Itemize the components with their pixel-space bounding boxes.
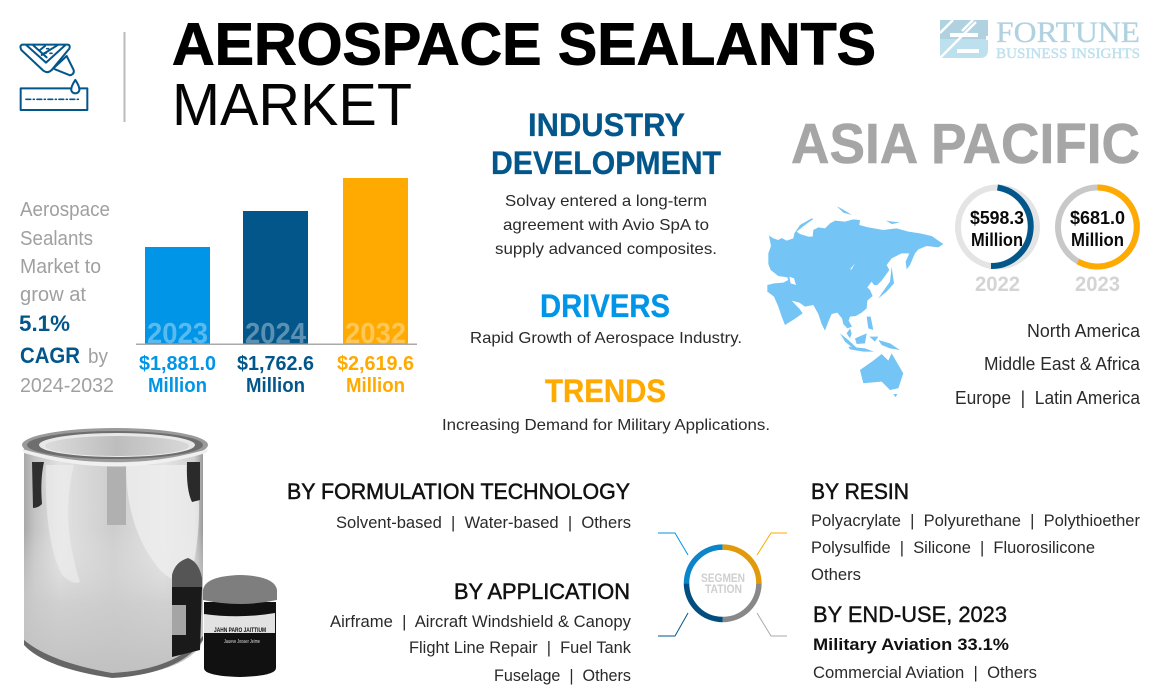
icon: sealant tube and surface: [20, 45, 87, 110]
bar 2032: Million: [346, 375, 405, 397]
small bottle: [172, 558, 202, 657]
segment: by resin: BY RESIN: [811, 479, 909, 504]
segment: by application: Airframe | Aircraft Windshield & Canopy: [330, 613, 632, 631]
panel: trends: [442, 373, 770, 434]
donut: 2022 value: [958, 188, 1037, 296]
logo: Fortune Business Insights: FORTUNE: [996, 16, 1140, 49]
text block: market growth CAGR: grow at: [20, 284, 86, 306]
image: sealant can and jars: [22, 428, 277, 678]
donut: 2023 value: Million: [1071, 230, 1124, 250]
text block: market growth CAGR: 2024-2032: [20, 375, 114, 397]
donut: 2023 value: [1058, 188, 1137, 296]
title: [172, 12, 876, 138]
panel: trends: Increasing Demand for Military Applications.: [442, 417, 770, 434]
text block: market growth CAGR: Market to: [20, 256, 101, 278]
text block: other regions: Middle East & Africa: [984, 354, 1141, 374]
bar 2023: Million: [148, 375, 207, 397]
jar: [203, 575, 277, 677]
bar 2032: 2032: [345, 318, 406, 350]
donut: 2023 value: 2023: [1075, 273, 1120, 296]
bar 2024: Million: [246, 375, 305, 397]
segment: by end-use: Commercial Aviation | Others: [813, 664, 1037, 682]
diagram: segmentation ring: SEGMEN: [701, 573, 745, 585]
panel: drivers: Rapid Growth of Aerospace Industry.: [470, 330, 742, 347]
panel: industry development: supply advanced composites.: [495, 241, 717, 258]
bar 2024: $1,762.6: [237, 353, 314, 375]
text block: other regions: Europe | Latin America: [955, 388, 1141, 408]
text block: market growth CAGR: 5.1%: [19, 311, 70, 336]
panel: drivers: DRIVERS: [540, 288, 670, 324]
text block: market growth CAGR: Aerospace: [20, 199, 110, 221]
can lid: [22, 428, 208, 466]
title: AEROSPACE SEALANTS: [172, 12, 876, 78]
bar 2032: [337, 178, 414, 397]
panel: trends: TRENDS: [545, 373, 666, 409]
bar 2023: [139, 247, 216, 397]
bar 2032: $2,619.6: [337, 353, 414, 375]
text block: other regions: North America: [1027, 321, 1141, 341]
segment: by resin: Polysulfide | Silicone | Fluorosilicone: [811, 539, 1095, 557]
segment: by application: Flight Line Repair | Fuel Tank: [409, 639, 632, 657]
bar chart: [136, 178, 417, 397]
bar 2024: 2024: [245, 318, 306, 350]
segment: by end-use: BY END-USE, 2023: [813, 602, 1007, 627]
segment: by application: Fuselage | Others: [494, 667, 631, 685]
bar 2023: 2023: [147, 318, 208, 350]
segment: by formulation technology: Solvent-based | Water-based | Others: [336, 514, 631, 532]
bar 2024: [237, 211, 314, 397]
diagram: segmentation ring: TATION: [705, 584, 742, 596]
panel: industry development: agreement with Avio SpA to: [503, 217, 709, 234]
panel: industry development: INDUSTRY: [528, 107, 685, 143]
text block: market growth CAGR: Sealants: [20, 228, 93, 250]
panel: industry development: Solvay entered a long-term: [505, 193, 707, 210]
segment: by formulation technology: [287, 479, 631, 532]
bar 2023: $1,881.0: [139, 353, 216, 375]
jar: JAHN PARO JAITTIUM: [214, 628, 266, 634]
segment: by formulation technology: BY FORMULATION TECHNOLOGY: [287, 479, 630, 504]
text block: market growth CAGR: CAGR: [20, 343, 80, 368]
can body: [24, 446, 203, 678]
segment: by end-use: Military Aviation 33.1%: [813, 635, 1009, 654]
title: MARKET: [172, 72, 412, 138]
diagram: segmentation ring: [658, 533, 787, 636]
text block: other regions: [955, 321, 1141, 408]
donut: 2022 value: Million: [971, 230, 1023, 250]
panel: industry development: [491, 107, 721, 258]
donut: 2023 value: $681.0: [1070, 208, 1125, 228]
segment: by resin: Others: [811, 566, 861, 584]
text block: market growth CAGR: [19, 199, 114, 397]
divider: [124, 32, 126, 122]
panel: drivers: [470, 288, 742, 347]
heading: Asia Pacific: ASIA PACIFIC: [791, 112, 1140, 176]
logo: Fortune Business Insights: BUSINESS INSIGHTS: [996, 46, 1140, 62]
segment: by end-use: [813, 602, 1037, 682]
segment: by application: BY APPLICATION: [454, 579, 630, 604]
logo: Fortune Business Insights: [940, 16, 1140, 62]
donut: 2022 value: 2022: [975, 273, 1020, 296]
text block: market growth CAGR: by: [88, 346, 108, 368]
map: Asia Pacific: [767, 206, 943, 397]
donut: 2022 value: $598.3: [970, 208, 1024, 228]
segment: by application: [330, 579, 632, 685]
segment: by resin: Polyacrylate | Polyurethane | Polythioether: [811, 512, 1140, 530]
segment: by resin: [811, 479, 1140, 584]
jar: Jaueve Jooaer Jeime: [224, 639, 260, 645]
panel: industry development: DEVELOPMENT: [491, 145, 721, 181]
